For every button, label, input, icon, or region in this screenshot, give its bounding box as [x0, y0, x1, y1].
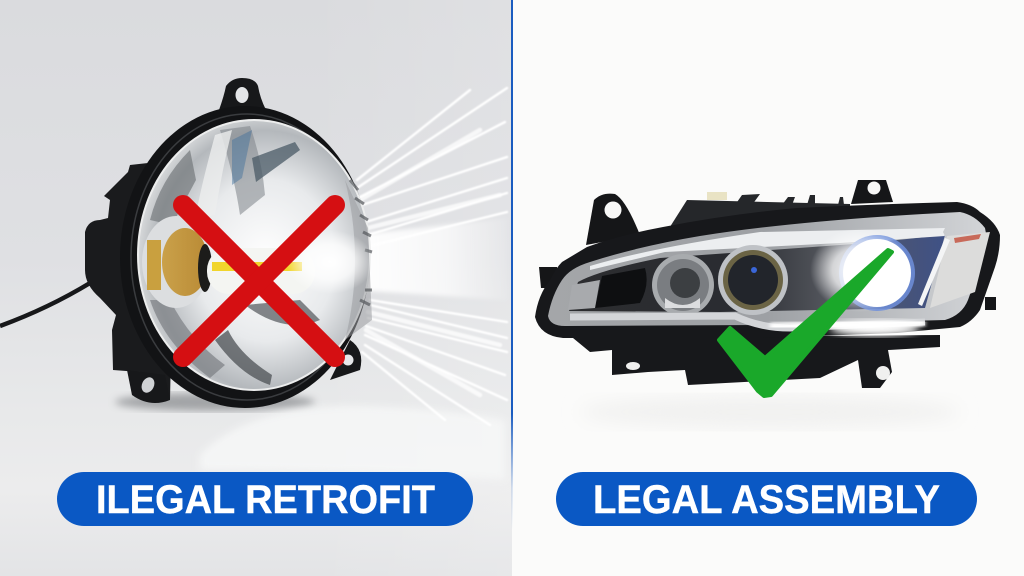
mounting tab top — [219, 78, 266, 110]
left black reflector — [595, 268, 647, 308]
cable — [0, 283, 90, 326]
bulb socket — [142, 216, 212, 308]
floor highlight — [200, 406, 505, 480]
mounting tab lower left — [127, 370, 170, 403]
LED strip — [570, 316, 925, 336]
bulb — [207, 248, 315, 294]
icon: green check — [719, 250, 892, 396]
retrofit lamp — [0, 78, 374, 408]
icon: red X — [183, 205, 335, 357]
reflector streaks — [220, 126, 265, 215]
lens glass — [548, 212, 986, 326]
housing outline — [535, 202, 1000, 338]
mounting tab upper right — [851, 180, 893, 204]
bulb glow — [286, 230, 374, 294]
floor shadow — [115, 393, 315, 411]
rear housing — [85, 160, 175, 400]
divider — [511, 0, 513, 530]
label: legal assembly — [556, 472, 977, 526]
lower body — [573, 335, 940, 388]
lens — [138, 120, 370, 390]
panel: legal assembly background — [512, 0, 1024, 576]
light rays — [357, 88, 507, 425]
projector lens left — [652, 254, 714, 316]
rear housing and fins — [668, 194, 850, 230]
mounting tab lower right — [330, 340, 361, 380]
projector lens bright — [810, 228, 915, 312]
mounting tab upper left — [586, 194, 640, 245]
glare beam — [355, 218, 507, 300]
lens edge ripple — [350, 180, 372, 305]
connector cap — [707, 192, 727, 200]
panel: illegal retrofit background — [0, 0, 512, 576]
tab hole lower right — [342, 354, 354, 366]
side nubs — [539, 267, 996, 310]
tab hole lower left — [139, 375, 157, 395]
tab hole top — [236, 87, 248, 103]
label: illegal retrofit: ILEGAL RETROFIT — [96, 478, 435, 522]
headlight assembly — [535, 180, 1000, 396]
interior — [569, 235, 945, 312]
chrome strip — [590, 228, 945, 270]
tab hole upper right — [868, 182, 880, 194]
tab holes lower — [626, 362, 890, 380]
turn signal — [930, 232, 990, 308]
projector lens center — [718, 245, 788, 315]
label: illegal retrofit — [57, 472, 473, 526]
outer ring — [120, 106, 370, 408]
chrome bezel — [918, 238, 950, 306]
label: legal assembly: LEGAL ASSEMBLY — [593, 478, 940, 522]
tab hole upper left — [604, 202, 622, 218]
